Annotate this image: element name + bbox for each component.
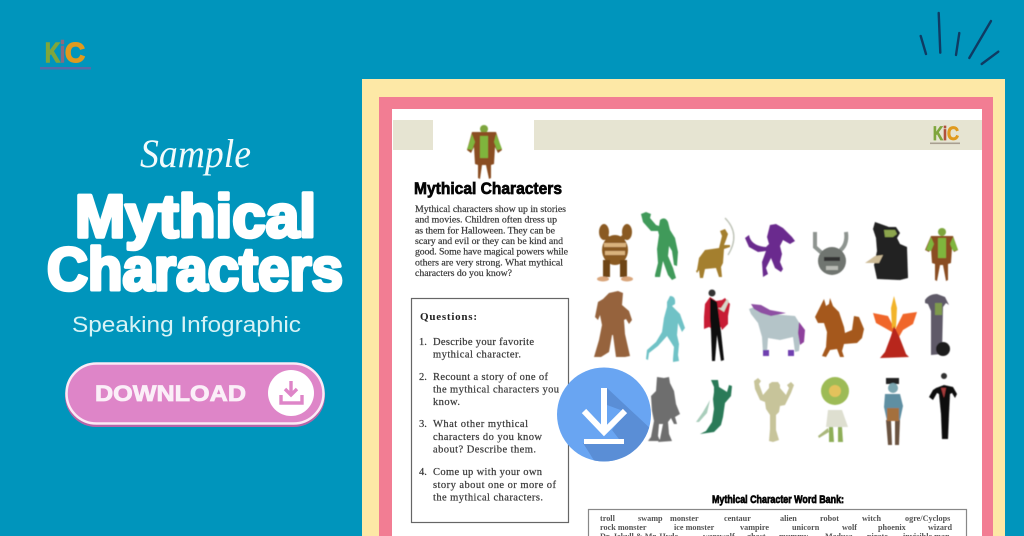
text block: introduction: scary and evil or they can be kind and [415,236,563,247]
text block: introduction: characters do you know? [415,268,512,279]
title: Mythical Characters: Mythical [75,183,316,250]
logo: KiC worksheet: C [947,124,959,145]
panel: word bank: vampire [740,523,769,532]
character: swamp monster [641,212,678,280]
panel: word bank: centaur [724,514,751,523]
character: phoenix [873,296,917,358]
icon: large blue download badge [557,368,652,470]
panel: worksheet preview frame [362,79,1005,536]
logo: KiC worksheet: K [933,124,943,145]
illustration: character grid [594,212,958,445]
panel: questions: story about one or more of [433,480,556,491]
panel: word bank: alien [780,514,797,523]
panel: questions [412,298,568,522]
panel: questions: Questions: [420,311,477,323]
text block: introduction: good. Some have magical powers while [415,247,569,258]
character: troll [597,224,633,282]
panel: questions: 2. [419,372,427,383]
title: Mythical Characters: Characters [47,236,343,303]
panel: word bank: unicorn [792,523,820,532]
download button [65,364,325,427]
character: vampire [704,290,730,361]
heading: word bank: Mythical Character Word Bank: [712,494,844,506]
panel: questions: 4. [419,467,427,478]
text block: introduction [415,204,569,279]
text block: introduction: others are very strong. What mythical [415,257,563,268]
panel: questions: the mythical characters you [433,384,560,396]
character: ogre [925,228,958,281]
logo: KiC top left: C [65,37,85,68]
character: ghost [696,380,732,434]
panel: word bank: phoenix [878,523,907,532]
character: medusa [818,377,849,442]
logo: KiC top left [40,36,91,70]
character: witch [865,222,908,280]
panel: questions: the mythical characters. [433,492,543,504]
character: robot [815,232,846,275]
panel: word bank: ice monster [674,523,715,532]
panel: word bank: monster [670,514,699,523]
panel: word bank: troll [600,514,616,523]
character: wizard with cauldron [925,294,950,356]
panel: questions: Describe your favorite [433,337,534,348]
panel: word bank: wolf [842,523,857,532]
character: invisible man [929,373,957,439]
logo: KiC top left: i [60,36,65,69]
panel: word bank: wizard [928,523,953,532]
character: mummy [754,378,794,442]
icon: ogre at worksheet top [467,125,502,179]
panel: questions: mythical character. [433,350,521,360]
text block: introduction: Mythical characters show up in stories [415,204,566,215]
character: brown wolf [815,298,864,357]
logo: KiC worksheet [930,124,960,145]
panel: questions: about? Describe them. [433,444,536,456]
panel: questions: characters do you know [433,432,542,443]
text block: introduction: as them for Halloween. They can be [415,225,556,236]
text block: introduction: and movies. Children often dress up [415,215,557,226]
title: Mythical Characters [47,183,343,303]
panel: questions: 3. [419,419,427,430]
heading: worksheet title: Mythical Characters [414,180,562,198]
logo: KiC top left: K [45,37,60,68]
heading: Sample: Sample [140,131,251,176]
panel: questions: know. [433,397,460,408]
download button: DOWNLOAD [95,381,246,406]
character: unicorn [749,304,805,356]
character: werewolf [648,377,680,442]
logo: KiC worksheet: i [943,124,947,145]
panel: questions: Recount a story of one of [433,372,548,383]
panel: word bank: witch [862,514,882,523]
panel: word bank: rock monster [600,523,647,532]
panel: word bank: swamp [638,514,663,523]
character: centaur [696,218,734,278]
subtitle: Speaking Infographic: Speaking Infographic [72,312,301,337]
panel: word bank [588,510,966,536]
character: tree creature [594,291,632,357]
panel: word bank: robot [820,514,839,523]
panel: questions: What other mythical [433,419,528,430]
character: aqua runner [646,296,685,362]
character: alien [745,224,795,277]
panel: word bank: ogre/Cyclops [905,514,950,523]
decorative burst lines [921,13,998,64]
panel: questions: Come up with your own [433,467,543,478]
panel: questions: 1. [419,337,427,348]
character: pirate [884,378,903,445]
